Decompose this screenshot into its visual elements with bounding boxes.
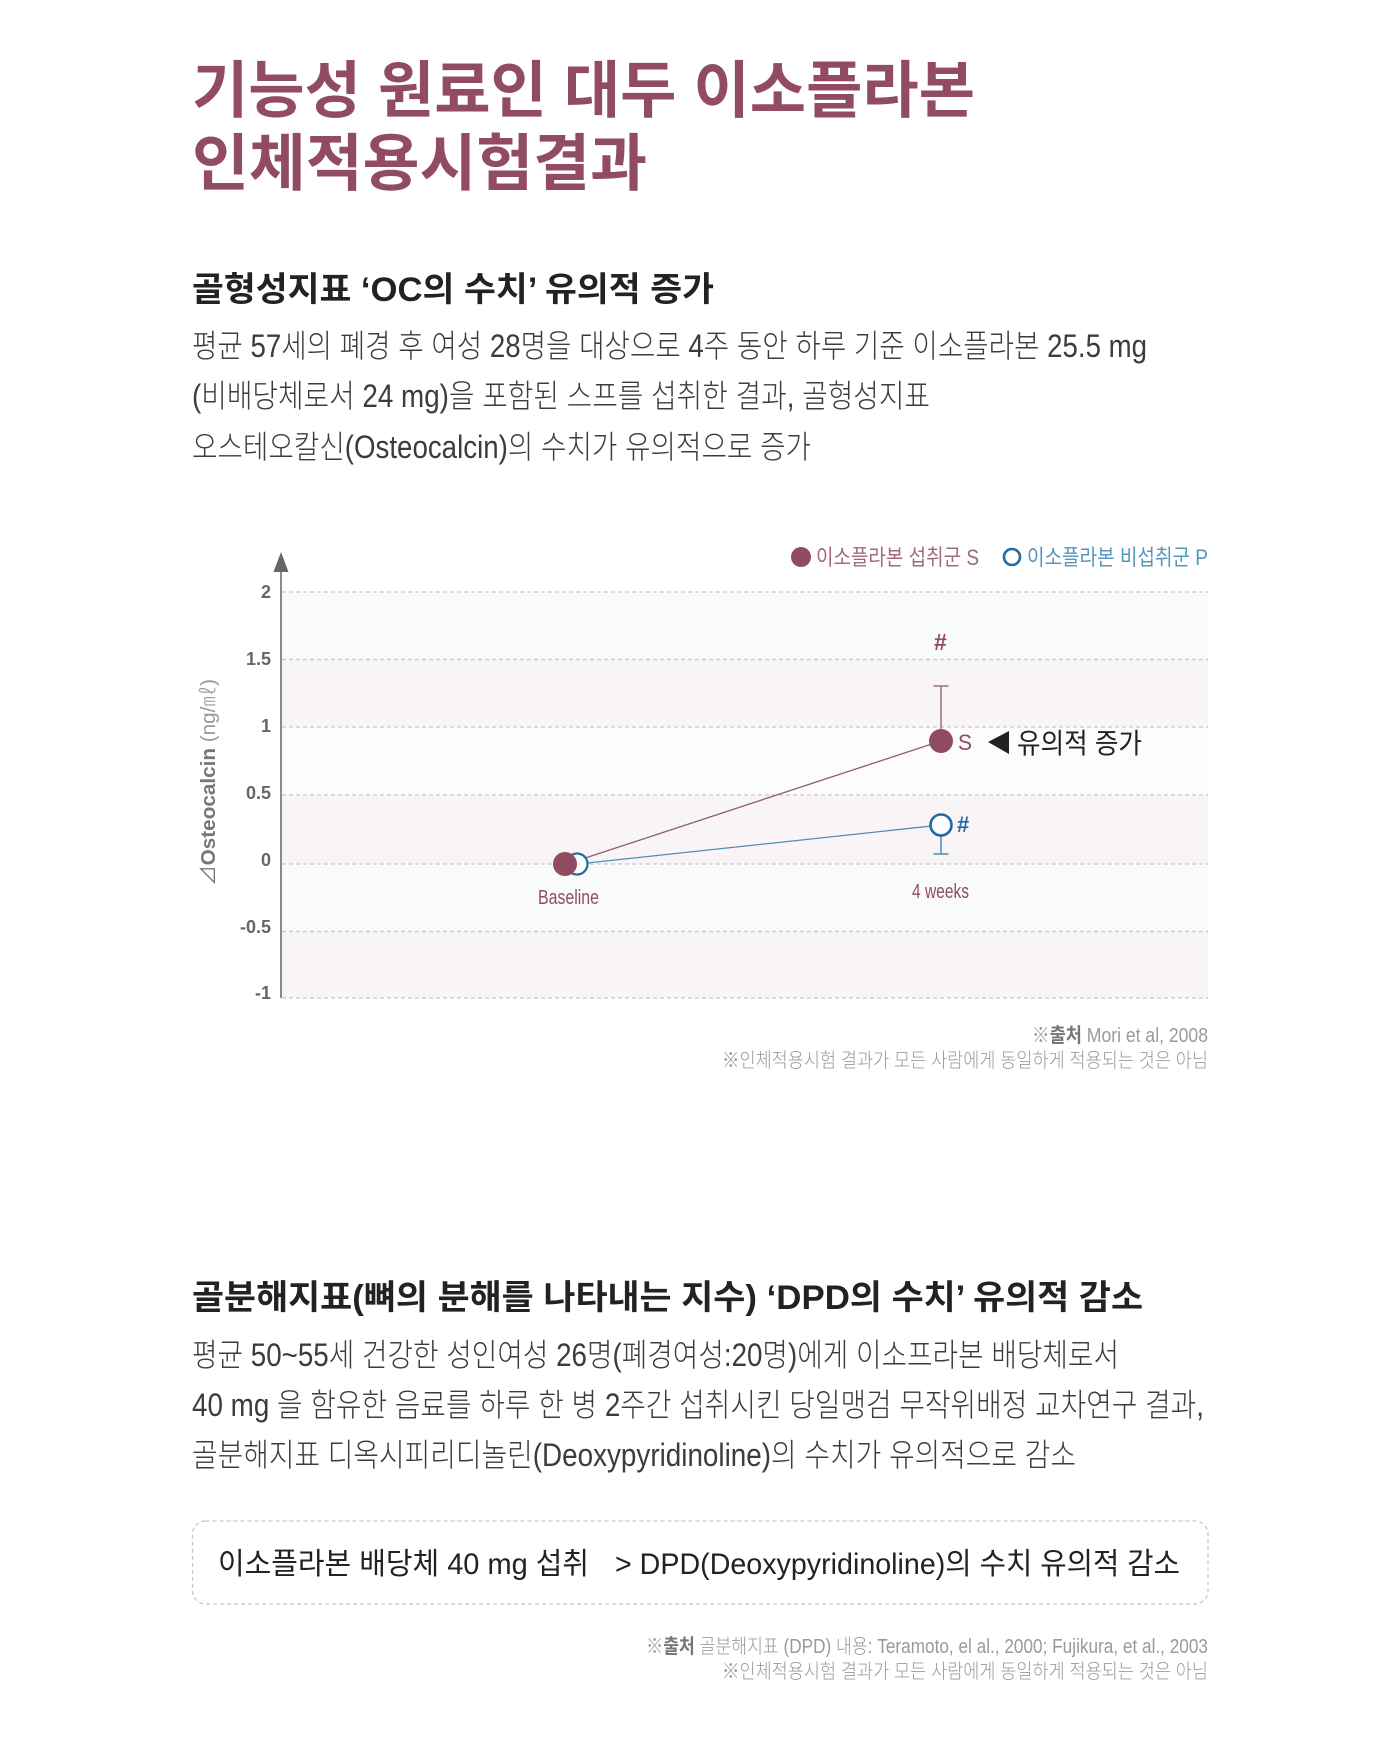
y axis ticks: 0 [261, 850, 271, 870]
point labels: S [958, 730, 972, 755]
y axis ticks: -0.5 [240, 917, 271, 937]
callout box: DPD result [192, 1521, 1208, 1604]
callout: significant increase: 유의적 증가 [1017, 728, 1142, 759]
baseline markers [553, 852, 588, 876]
text block: osteocalcin description [192, 328, 1147, 465]
chart legend: 이소플라본 비섭취군 P [1027, 545, 1208, 570]
y axis ticks [240, 582, 271, 1003]
title: 기능성 원료인 대두 이소플라본 [192, 57, 975, 126]
plot bands [282, 592, 1208, 998]
y axis ticks: 1.5 [246, 649, 271, 669]
source note: osteocalcin: ※인체적용시험 결과가 모든 사람에게 동일하게 적용되는 것은 아님 [722, 1049, 1208, 1072]
heading: DPD section: 골분해지표(뼈의 분해를 나타내는 지수) ‘DPD의 수치’ 유의적 감소 [192, 1279, 1143, 1317]
title: 인체적용시험결과 [192, 130, 647, 199]
x axis labels: Baseline [538, 887, 599, 909]
source note: osteocalcin: ※출처 Mori et al, 2008 [1032, 1024, 1208, 1047]
error bar S [934, 686, 948, 741]
point labels [934, 629, 972, 837]
title [192, 57, 975, 199]
callout box: DPD result: > DPD(Deoxypyridinoline)의 수치 유의적 감소 [615, 1548, 1180, 1581]
series S line [567, 741, 941, 864]
text block: DPD description: 골분해지표 디옥시피리디놀린(Deoxypyridinoline)의 수치가 유의적으로 감소 [192, 1437, 1076, 1473]
y axis ticks: 2 [261, 582, 271, 602]
text block: osteocalcin description: 오스테오칼신(Osteocalcin)의 수치가 유의적으로 증가 [192, 429, 811, 465]
text block: osteocalcin description: (비배당체로서 24 mg)을 포함된 스프를 섭취한 결과, 골형성지표 [192, 378, 930, 414]
text block: DPD description: 40 mg 을 함유한 음료를 하루 한 병 2주간 섭취시킨 당일맹검 무작위배정 교차연구 결과, [192, 1387, 1204, 1423]
point labels: # [957, 812, 969, 837]
chart legend [791, 545, 1208, 570]
y axis arrow [274, 552, 288, 998]
callout box: DPD result: 이소플라본 배당체 40 mg 섭취 [218, 1548, 589, 1581]
text block: DPD description: 평균 50~55세 건강한 성인여성 26명(폐경여성:20명)에게 이소프라본 배당체로서 [192, 1337, 1119, 1373]
x axis labels: 4 weeks [912, 881, 969, 903]
text block: DPD description [192, 1337, 1204, 1473]
y axis ticks: -1 [255, 983, 271, 1003]
text block: osteocalcin description: 평균 57세의 폐경 후 여성 28명을 대상으로 4주 동안 하루 기준 이소플라본 25.5 mg [192, 328, 1147, 364]
source note: DPD [646, 1635, 1208, 1683]
source note: DPD: ※인체적용시험 결과가 모든 사람에게 동일하게 적용되는 것은 아님 [722, 1660, 1208, 1683]
source note: osteocalcin [722, 1024, 1208, 1072]
y axis label: ⊿Osteocalcin (ng/㎖) [198, 679, 220, 886]
y axis ticks: 0.5 [246, 783, 271, 803]
chart legend: 이소플라본 섭취군 S [816, 545, 979, 570]
error bar P [934, 825, 948, 854]
series P line [578, 825, 941, 864]
heading: osteocalcin section: 골형성지표 ‘OC의 수치’ 유의적 증가 [192, 271, 714, 309]
x axis labels [538, 881, 969, 909]
point labels: # [934, 629, 947, 655]
source note: DPD: ※출처 골분해지표 (DPD) 내용: Teramoto, el al., 2000; Fujikura, et al., 2003 [646, 1635, 1208, 1658]
y axis ticks: 1 [261, 716, 271, 736]
line chart: osteocalcin change [198, 545, 1208, 1003]
4 weeks markers [929, 729, 953, 836]
